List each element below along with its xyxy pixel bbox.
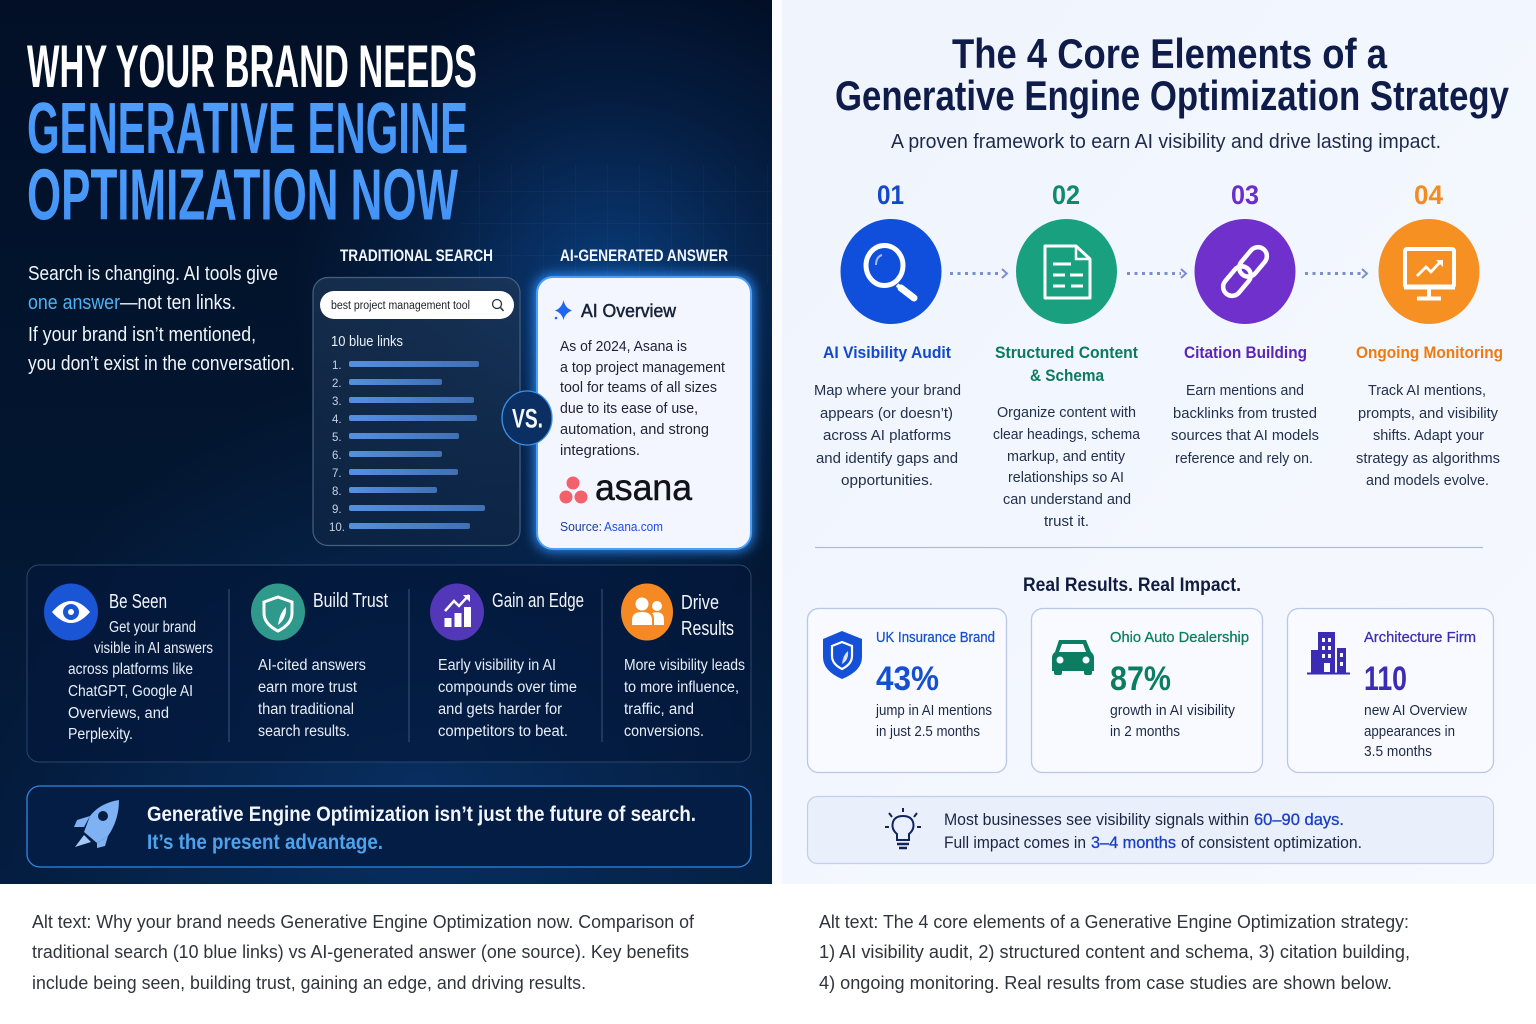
- card: Ohio auto dealership: [1032, 608, 1262, 772]
- title: GENERATIVE ENGINE: [27, 89, 468, 169]
- arrow: step 1 to 2: [950, 269, 1007, 278]
- step 1: AI visibility audit: 01: [877, 180, 904, 210]
- benefit: drive results: conversions.: [624, 723, 704, 740]
- benefit: be seen: [44, 584, 213, 743]
- benefit: be seen: Get your brand: [109, 619, 196, 636]
- step 4: ongoing monitoring: prompts, and visibility: [1358, 406, 1499, 422]
- intro text: you don’t exist in the conversation.: [28, 353, 295, 375]
- step 4: ongoing monitoring: [1356, 180, 1503, 489]
- list of ten links: 1.: [332, 360, 342, 372]
- benefit: gain an edge: Early visibility in AI: [438, 657, 556, 674]
- benefit: be seen: Perplexity.: [68, 726, 133, 743]
- alt text: right: [819, 912, 1410, 993]
- benefit: gain an edge: compounds over time: [438, 679, 577, 696]
- card: architecture firm: new AI Overview: [1364, 703, 1467, 719]
- panel: 4 core elements: [772, 0, 1536, 884]
- step 3: citation building: sources that AI models: [1171, 428, 1319, 444]
- icon: building: [1307, 632, 1350, 674]
- step 4: ongoing monitoring: Track AI mentions,: [1368, 383, 1486, 399]
- alt text: right: Alt text: The 4 core elements of a Generative Engine Optimization strategy:: [819, 912, 1409, 932]
- step 3: citation building: [1171, 180, 1319, 467]
- benefit: be seen: ChatGPT, Google AI: [68, 683, 193, 700]
- step 2: structured content and schema: clear headings, schema: [993, 427, 1141, 443]
- icon: car: [1052, 640, 1094, 675]
- step 2: structured content and schema: markup, and entity: [1007, 449, 1126, 465]
- card: UK insurance brand: jump in AI mentions: [875, 703, 992, 719]
- benefit: gain an edge: competitors to beat.: [438, 723, 568, 740]
- list of ten links: 9.: [332, 504, 342, 516]
- icon: monitor: [1378, 219, 1480, 324]
- logo: asana: asana: [595, 467, 692, 508]
- heading: AI-generated answer: AI-GENERATED ANSWER: [560, 246, 728, 265]
- benefit: drive results: traffic, and: [624, 701, 694, 718]
- step 1: AI visibility audit: across AI platforms: [823, 428, 951, 444]
- list of ten links: 4.: [332, 414, 342, 426]
- callout: present advantage: [27, 786, 751, 867]
- list of ten links: 8.: [332, 486, 342, 498]
- source line: Source:: [560, 520, 602, 534]
- benefit: gain an edge: Gain an Edge: [492, 590, 584, 612]
- step 1: AI visibility audit: [814, 180, 961, 489]
- step 2: structured content and schema: Organize content with: [997, 405, 1136, 421]
- step 2: structured content and schema: [993, 180, 1141, 530]
- intro text: If your brand isn’t mentioned,: [28, 324, 256, 346]
- callout: timing tip: [808, 796, 1494, 864]
- badge: VS: [502, 391, 552, 445]
- list of ten links: 2.: [332, 378, 342, 390]
- title: The 4 Core Elements of a: [952, 30, 1388, 77]
- list of ten links: 5.: [332, 432, 342, 444]
- callout: present advantage: It’s the present advantage.: [147, 830, 383, 854]
- subtitle: A proven framework to earn AI visibility and drive lasting impact.: [891, 131, 1441, 153]
- card: UK insurance brand: [808, 608, 1006, 772]
- card: architecture firm: Architecture Firm: [1364, 630, 1476, 646]
- card: architecture firm: appearances in: [1364, 724, 1455, 740]
- benefit: drive results: [621, 584, 745, 740]
- intro text: Search is changing. AI tools give: [28, 263, 278, 285]
- heading: traditional search: TRADITIONAL SEARCH: [340, 246, 493, 265]
- step 3: citation building: 03: [1231, 180, 1259, 210]
- benefit: build trust: search results.: [258, 723, 350, 740]
- callout: present advantage: Generative Engine Optimization isn’t just the future of search.: [147, 802, 696, 826]
- step 2: structured content and schema: relationships so AI: [1008, 470, 1124, 486]
- arrow: step 2 to 3: [1127, 269, 1186, 278]
- intro text: one answer: [28, 292, 120, 314]
- intro text: —not ten links.: [120, 292, 236, 314]
- card: UK insurance brand: 43%: [876, 660, 939, 698]
- benefit: be seen: Overviews, and: [68, 705, 169, 722]
- card: Ohio auto dealership: Ohio Auto Dealership: [1110, 630, 1249, 646]
- source line: [560, 520, 663, 534]
- benefit: gain an edge: [430, 584, 584, 740]
- title: OPTIMIZATION NOW: [27, 156, 458, 236]
- title: WHY YOUR BRAND NEEDS: [27, 33, 477, 100]
- step 2: structured content and schema: & Schema: [1030, 366, 1104, 385]
- step 1: AI visibility audit: and identify gaps and: [816, 451, 958, 467]
- benefit: be seen: visible in AI answers: [94, 640, 213, 657]
- icon: shield: [823, 631, 862, 679]
- source line: Asana.com: [604, 520, 663, 534]
- title: [835, 30, 1510, 119]
- step 3: citation building: Earn mentions and: [1186, 383, 1304, 399]
- panel: traditional search: [313, 278, 520, 546]
- heading: real results: Real Results. Real Impact.: [1023, 575, 1241, 596]
- icon: growth chart: [430, 584, 484, 640]
- alt text: left: Alt text: Why your brand needs Generative Engine Optimization now. Comparison of: [32, 912, 695, 932]
- label: 10 blue links: 10 blue links: [331, 334, 403, 350]
- answer text: automation, and strong: [560, 422, 709, 438]
- benefit: drive results: to more influence,: [624, 679, 739, 696]
- intro text: [28, 263, 295, 375]
- callout: timing tip: 3–4 months: [1091, 834, 1176, 852]
- badge: VS: VS.: [512, 404, 543, 434]
- card: Ohio auto dealership: 87%: [1110, 660, 1171, 698]
- panel: why your brand needs GEO: [0, 0, 772, 884]
- answer text: due to its ease of use,: [560, 401, 698, 417]
- step 3: citation building: reference and rely on.: [1175, 451, 1313, 467]
- list of ten links: 6.: [332, 450, 342, 462]
- icon: eye: [44, 584, 98, 640]
- panel: AI overview: [535, 275, 753, 551]
- card: architecture firm: 3.5 months: [1364, 744, 1432, 760]
- benefit: be seen: Be Seen: [109, 591, 167, 613]
- step 2: structured content and schema: 02: [1052, 180, 1080, 210]
- list of ten links: [329, 360, 485, 534]
- icon: magnifier: [840, 219, 942, 324]
- icon: shield: [251, 584, 305, 640]
- title: [27, 33, 477, 236]
- callout: timing tip: 60–90 days.: [1254, 811, 1344, 829]
- step 2: structured content and schema: trust it.: [1044, 514, 1089, 530]
- step 1: AI visibility audit: AI Visibility Audit: [823, 343, 951, 362]
- alt text: left: include being seen, building trust, gaining an edge, and driving results.: [32, 973, 586, 993]
- step 1: AI visibility audit: opportunities.: [841, 473, 933, 489]
- alt text: right: 4) ongoing monitoring. Real results from case studies are shown below.: [819, 973, 1392, 993]
- icon: rocket: [74, 800, 119, 848]
- list of ten links: 7.: [332, 468, 342, 480]
- answer text: [560, 339, 725, 459]
- answer text: a top project management: [560, 360, 725, 376]
- card: architecture firm: 110: [1364, 660, 1407, 698]
- icon: AI sparkle: [555, 300, 572, 320]
- icon: chain link: [1194, 219, 1296, 324]
- callout: timing tip: of consistent optimization.: [1181, 834, 1362, 852]
- card: UK insurance brand: UK Insurance Brand: [876, 630, 995, 646]
- benefit: gain an edge: and gets harder for: [438, 701, 562, 718]
- benefit: drive results: Results: [681, 618, 734, 640]
- list of ten links: 3.: [332, 396, 342, 408]
- icon: document: [1016, 219, 1117, 324]
- step 3: citation building: Citation Building: [1184, 343, 1307, 362]
- search bar: best project management tool: [331, 300, 470, 312]
- step 1: AI visibility audit: appears (or doesn’t): [820, 406, 953, 422]
- callout: timing tip: Most businesses see visibility signals within: [944, 811, 1249, 829]
- card: Ohio auto dealership: growth in AI visibility: [1110, 703, 1236, 719]
- step 1: AI visibility audit: Map where your brand: [814, 383, 961, 399]
- card: Ohio auto dealership: in 2 months: [1110, 724, 1180, 740]
- heading: AI overview: AI Overview: [581, 301, 677, 321]
- answer text: As of 2024, Asana is: [560, 339, 687, 355]
- icon: people: [621, 584, 673, 640]
- search bar: [320, 291, 514, 319]
- alt text: right: 1) AI visibility audit, 2) structured content and schema, 3) citation building,: [819, 942, 1410, 962]
- benefit: drive results: Drive: [681, 592, 719, 614]
- step 2: structured content and schema: can understand and: [1003, 492, 1131, 508]
- alt text: left: [32, 912, 695, 993]
- step 4: ongoing monitoring: and models evolve.: [1366, 473, 1489, 489]
- step 2: structured content and schema: Structured Content: [995, 343, 1138, 362]
- answer text: tool for teams of all sizes: [560, 380, 717, 396]
- benefit: build trust: earn more trust: [258, 679, 358, 696]
- step 4: ongoing monitoring: shifts. Adapt your: [1373, 428, 1484, 444]
- step 4: ongoing monitoring: 04: [1414, 180, 1443, 210]
- panel: benefits: [27, 565, 751, 762]
- step 4: ongoing monitoring: Ongoing Monitoring: [1356, 343, 1503, 362]
- benefit: build trust: Build Trust: [313, 590, 388, 612]
- icon: light bulb: [885, 808, 921, 848]
- arrow: step 3 to 4: [1305, 269, 1367, 278]
- card: architecture firm: [1288, 608, 1494, 772]
- benefit: build trust: [251, 584, 388, 740]
- benefit: be seen: across platforms like: [68, 661, 193, 678]
- benefit: build trust: AI-cited answers: [258, 657, 366, 674]
- alt text: left: traditional search (10 blue links) vs AI-generated answer (one source). Key benefits: [32, 942, 689, 962]
- step 4: ongoing monitoring: strategy as algorithms: [1356, 451, 1500, 467]
- card: UK insurance brand: in just 2.5 months: [876, 724, 980, 740]
- benefit: drive results: More visibility leads: [624, 657, 745, 674]
- answer text: integrations.: [560, 443, 640, 459]
- step 3: citation building: backlinks from trusted: [1173, 406, 1317, 422]
- benefit: build trust: than traditional: [258, 701, 354, 718]
- callout: timing tip: Full impact comes in: [944, 834, 1086, 852]
- list of ten links: 10.: [329, 522, 345, 534]
